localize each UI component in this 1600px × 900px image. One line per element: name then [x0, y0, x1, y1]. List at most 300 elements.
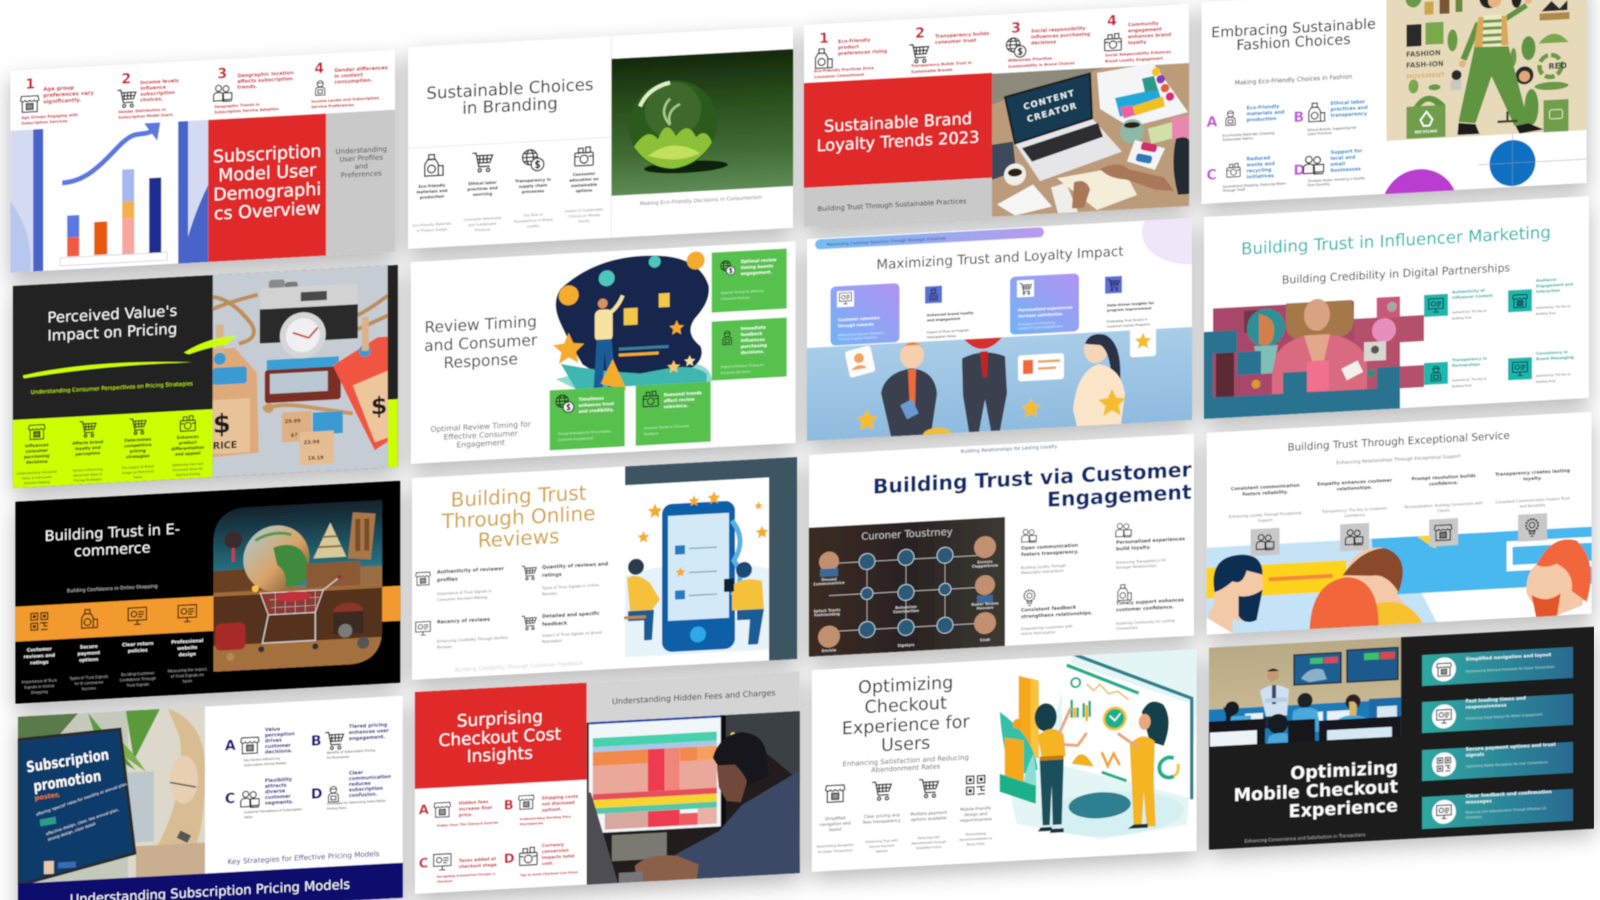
- item headings: Prompt resolution builds: [1411, 473, 1476, 483]
- item headings: customer: [265, 743, 291, 750]
- item subtext: Importance of Trust Signals in: [437, 589, 493, 596]
- item text: Ethical labor: [1330, 99, 1366, 107]
- title: Building Trust in Influencer Marketing: [1241, 223, 1551, 259]
- title: Through Online: [441, 501, 595, 533]
- panel: Subscription Model User Demographics Overview: [10, 50, 395, 273]
- sublabels: Eco-Friendly Materials: [413, 222, 451, 228]
- sublabels: Trends: [577, 219, 590, 224]
- icon circles: [1432, 657, 1456, 825]
- labels: Transparency in: [515, 177, 551, 184]
- item subtext: Building Loyalty Through: [1021, 564, 1066, 570]
- tile headings: timing boosts: [741, 263, 774, 270]
- item subtext: Authenticity: The Key to: [1452, 309, 1487, 314]
- panel: Building Trust via Customer Engagement: [809, 434, 1194, 657]
- sublabels: The Role of: [522, 213, 544, 218]
- labels: Influences: [25, 442, 49, 448]
- item headings: Personalized experiences: [1116, 536, 1185, 546]
- panel: Building Trust Through Exceptional Service: [1207, 412, 1592, 638]
- sublabels: for Faster Transactions: [818, 848, 853, 854]
- title: Surprising: [457, 707, 543, 732]
- sublabels: Optimal Pricing: [176, 472, 200, 477]
- item headings: Timely support enhances: [1116, 597, 1184, 607]
- item subtext: Enhancing Transparency for: [1116, 558, 1167, 565]
- title: Loyalty Trends 2023: [817, 127, 979, 155]
- item headings: fosters reliability.: [1242, 489, 1289, 498]
- item subtext: Hidden Fees: The Checkout Surprise: [437, 820, 498, 828]
- item subtext: Enhancing Credibility Through Verified: [437, 636, 508, 644]
- numbered items: trends.: [237, 84, 258, 91]
- title: Checkout: [865, 694, 947, 718]
- subtitle: Enhancing Relationships Through Exceptional Support: [1336, 453, 1461, 466]
- item headings: Partnerships: [1452, 361, 1481, 368]
- item subtext: Discrepancies: [520, 821, 544, 826]
- item headings: Taxes added at: [459, 856, 496, 864]
- illustration: person and stars: [553, 251, 712, 394]
- item subtext: Timeless Styles: Investing in Quality: [1307, 176, 1365, 183]
- labels: Multiple payment: [910, 810, 947, 817]
- tile icons: [1256, 519, 1538, 551]
- title: Insights: [467, 744, 533, 767]
- numbered items: Social Responsibility Enhances: [1105, 49, 1172, 58]
- numbered items: 3: [1011, 20, 1021, 37]
- sublabels: Boost Sales: [967, 842, 985, 847]
- labels: Determines: [124, 436, 152, 443]
- green tiles: [550, 249, 787, 450]
- item headings: Currency: [542, 842, 564, 849]
- item text: small: [1330, 161, 1345, 168]
- panel: Maximizing Trust and Loyalty Impact: Customer Loyalty Programs: [1107, 322, 1150, 329]
- title: Sustainable Choices: [426, 75, 594, 103]
- title: Sustainable Brand: [824, 109, 972, 136]
- panel: Optimizing Checkout Experience for Users: [812, 644, 1197, 872]
- labels: Secure: [80, 644, 98, 651]
- labels: Ethical labor: [468, 180, 497, 186]
- panel: Sustainable Choices in Branding: [408, 26, 793, 249]
- item headings: Detailed and specific: [542, 611, 600, 620]
- labels: options: [576, 187, 593, 193]
- illustration: business people and stars: [807, 324, 1192, 447]
- banner pill: Maximizing Customer Retention Through Strategic Initiatives: [827, 235, 946, 247]
- labels: competitive: [124, 442, 152, 448]
- red title block: [208, 113, 326, 262]
- item headings: diverse: [265, 788, 286, 795]
- tile subtext: Purchase Decisions: [721, 369, 751, 375]
- item text: businesses: [1330, 166, 1361, 174]
- numbered items: engagement: [1128, 26, 1163, 34]
- item text: local and: [1330, 155, 1356, 162]
- photo: call centre room: [1209, 637, 1401, 747]
- image: customer journey network: [809, 517, 1005, 657]
- labels: sourcing: [473, 191, 492, 197]
- labels: Simplified: [825, 815, 846, 821]
- panel: Perceived Value's Impact on Pricing: [13, 265, 398, 488]
- title: Experience: [1289, 796, 1398, 822]
- A B C D letters: D: [1294, 162, 1305, 179]
- labels: materials and: [416, 188, 448, 195]
- labels: fees transparency: [863, 818, 901, 825]
- sublabels: Confidence Through: [120, 677, 156, 683]
- photo: glass sphere: [611, 49, 793, 196]
- icons: [21, 79, 325, 113]
- labels: website: [177, 645, 197, 652]
- item headings: Interaction: [1536, 288, 1560, 294]
- title: Model User: [218, 161, 317, 186]
- labels: Enhances: [177, 434, 199, 440]
- item subtext: Secondhand Shopping: Reducing Waste: [1223, 181, 1286, 189]
- title: Experience for: [842, 712, 970, 739]
- feature subtext: Optimizing Mobile Navigation for User Convenience: [1466, 760, 1548, 769]
- item subtext: Benefits of Subscription Pricing: [327, 748, 375, 755]
- sublabels: Enhancing Trust with: [866, 838, 898, 844]
- title: Optimizing: [858, 673, 953, 698]
- labels: Eco-friendly: [419, 182, 446, 189]
- photo: laptop with subscription promotion: effective design, clear, low annual plan,: [45, 807, 119, 836]
- panel: Understanding Subscription Pricing Models: [18, 696, 403, 900]
- item headings: Authenticity of: [1452, 288, 1485, 294]
- item subtext: Confidence: [1344, 513, 1366, 518]
- numbered items: [21, 57, 388, 126]
- card text: increase satisfaction: [1018, 311, 1063, 318]
- column text: Data-driven insights for: [1107, 301, 1154, 308]
- photo: laptop with subscription promotion: strong design, clear detail: [47, 821, 96, 842]
- illustration: fashion woman: MOVEMENT: [1406, 72, 1446, 81]
- slate frame: [625, 457, 797, 668]
- photo: laptop on desk: CREATOR: [1026, 101, 1078, 125]
- sublabels: Factors Influencing: [73, 467, 103, 473]
- item headings: Transparency in: [1452, 356, 1487, 362]
- panel: Maximizing Trust and Loyalty Impact: Participation Rates: [927, 334, 956, 339]
- title: Perceived Value's: [47, 302, 177, 327]
- photo: camera and price tags: [213, 266, 388, 477]
- sublabels: for E-commerce: [74, 680, 104, 686]
- title: Optimizing: [1290, 758, 1398, 784]
- item text: Reduced: [1246, 155, 1271, 163]
- photo: laptop with subscription promotion: poster,: [34, 790, 60, 802]
- item subtext: Active Participation: [1021, 630, 1056, 636]
- item subtext: Stronger Relationships: [1116, 564, 1157, 570]
- item subtext: Pricing Plans: [327, 806, 347, 811]
- icons: [1022, 523, 1131, 606]
- tile headings: engagement.: [741, 269, 772, 276]
- labels: strategies: [126, 453, 150, 459]
- title: Checkout Cost: [438, 725, 561, 751]
- column text: program improvement: [1107, 306, 1152, 313]
- sublabels: Abandonment through: [911, 840, 946, 846]
- illustration: fashion woman: [1386, 0, 1586, 141]
- item headings: feedback: [542, 621, 568, 628]
- labels: Customer: [27, 646, 52, 654]
- item subtext: Authenticity: The Key to: [1452, 377, 1487, 382]
- feature headings: Fast loading times and: [1466, 695, 1526, 705]
- labels: and appeal: [175, 450, 201, 457]
- panel: Surprising Checkout Cost Insights: [415, 671, 800, 894]
- red title block: [415, 683, 587, 789]
- sublabels: Simplified Forms: [916, 845, 942, 850]
- A B C D letters: B: [1294, 109, 1304, 126]
- letters: C: [225, 791, 235, 807]
- numbered items: Eco-Friendly Practices Drive: [814, 65, 874, 73]
- item headings: price.: [459, 812, 473, 819]
- subtitle: Abandonment Rates: [871, 762, 941, 774]
- item headings: Shipping costs: [542, 794, 578, 802]
- numbered items: preferences rising: [838, 48, 888, 57]
- numbered items: choices.: [140, 96, 163, 104]
- item headings: Consistent communication: [1231, 483, 1300, 492]
- numbered items: in content: [334, 72, 363, 80]
- item subtext: and Reliability: [1520, 503, 1546, 509]
- item headings: increase final: [459, 805, 493, 813]
- sublabels: Building Customer: [121, 671, 155, 677]
- sublabels: Pricing Strategies: [74, 477, 102, 483]
- lime band: [13, 409, 213, 488]
- item headings: fosters transparency.: [1021, 549, 1079, 558]
- labels: differentiation: [171, 445, 205, 451]
- title: Mobile Checkout: [1234, 777, 1399, 806]
- numbered items: consumption.: [334, 78, 373, 86]
- item subtext: Building Trust: [1452, 315, 1472, 320]
- image caption: Making Eco-Friendly Decisions in Consumerism: [640, 195, 762, 207]
- numbered items: Gender Distribution in: [118, 107, 166, 114]
- item headings: communication: [349, 774, 392, 782]
- feature subtext: Streamlining Payment Processes for Faster Transactions: [1466, 665, 1555, 674]
- image: customer journey network: Fashionlding: [814, 612, 840, 617]
- numbered items: product: [838, 44, 860, 51]
- numbered items: Community: [1128, 21, 1160, 28]
- item subtext: Authenticity: The Key to: [1536, 372, 1571, 378]
- purple semicircle: [1384, 168, 1455, 195]
- tile subtext: Seasonal Trends in Consumer: [644, 424, 690, 430]
- kicker: Building Relationships for Lasting Loyalty: [961, 444, 1057, 455]
- illustration: fashion woman: FASH-ION: [1406, 60, 1444, 70]
- item text: recycling: [1246, 167, 1272, 175]
- photo: laptop on desk: [992, 61, 1190, 217]
- item subtext: Building Trust: [1452, 383, 1472, 388]
- item headings: upfront.: [542, 806, 562, 814]
- labels: pricing: [130, 448, 146, 454]
- tile headings: feedback: [741, 331, 762, 337]
- numbered items: Gender differences: [334, 65, 388, 74]
- item subtext: Reputation: [542, 639, 563, 644]
- letters: B: [311, 733, 322, 750]
- sublabels: Sales: [183, 679, 192, 684]
- item headings: Recency of reviews: [437, 617, 490, 626]
- labels: Clear pricing and: [864, 812, 900, 819]
- photo: laptop with subscription promotion: offering 'special' rates for monthly or annual plan,: [35, 781, 128, 817]
- numbered items: Subscription Model Users: [118, 112, 174, 120]
- illustration: two women at dashboard: [1000, 644, 1197, 845]
- item headings: Hidden fees: [459, 799, 489, 807]
- title: Reviews: [478, 524, 559, 552]
- labels: decisions: [26, 459, 48, 465]
- footer text: Building Credibility Through Customer Feedback: [455, 661, 584, 674]
- title: Fashion Choices: [1236, 32, 1351, 54]
- item text: waste and: [1246, 161, 1275, 169]
- feature subtext: Strategies: [1466, 815, 1482, 820]
- numbered items: Age group: [43, 85, 74, 93]
- item subtext: Sustainable Fabrics: [1222, 136, 1254, 142]
- icons: [434, 795, 537, 870]
- photo: camera and price tags: $: [371, 392, 387, 420]
- orange band: [15, 586, 400, 642]
- tile headings: enhances trust: [579, 401, 614, 408]
- item headings: Tiered pricing: [349, 722, 388, 730]
- panel: Maximizing Trust and Loyalty Impact: Measuring Customer Retention: [838, 331, 885, 337]
- panel: Maximizing Trust and Loyalty Impact: Through Loyalty Programs: [837, 335, 878, 341]
- item subtext: Consistent Communication Fosters Trust: [1495, 496, 1570, 504]
- feature subtext: Enhancing Visual Design for Better Engagement: [1466, 712, 1543, 721]
- item text: Support for: [1330, 148, 1363, 156]
- numbered items: Age Groups Engaging with: [21, 112, 78, 120]
- tile headings: purchasing: [741, 343, 767, 349]
- labels: perception: [75, 450, 100, 457]
- panel: Building Trust Through Online Reviews: [412, 457, 797, 680]
- image: customer journey network: Bulsanices: [895, 605, 917, 610]
- numbered items: Sustainable Brands: [911, 67, 953, 74]
- letters: A: [225, 738, 236, 754]
- item headings: Engagement and: [1536, 281, 1573, 288]
- photo: camera and price tags: 29.99: [285, 418, 301, 425]
- sublabels: in Product Design: [417, 227, 447, 233]
- sublabels: Transparency in Brand: [512, 218, 553, 224]
- panel: Building Trust in Influencer Marketing: [1204, 196, 1589, 419]
- subtitle: Effective Consumer: [444, 429, 519, 442]
- tile subtext: Feedback: [644, 431, 659, 436]
- numbered items: influence: [140, 85, 167, 92]
- numbered items: 2: [915, 25, 925, 42]
- numbered items: Transparency Builds Trust in: [911, 60, 972, 68]
- labels: Consumer: [573, 171, 595, 177]
- item subtext: Over Quantity: [1307, 182, 1330, 187]
- sublabels: Balancing Cost and: [172, 462, 203, 467]
- title: Response: [444, 350, 518, 372]
- numbered items: 2: [121, 71, 131, 88]
- labels: design and: [964, 811, 988, 817]
- labels: reviews and: [24, 653, 55, 660]
- sublabels: Value in Consumer: [22, 475, 52, 481]
- numbered items: Consumer Commitment: [814, 72, 864, 79]
- numbered items: Service Preferences: [311, 102, 355, 109]
- item text: transparency: [1330, 111, 1368, 119]
- sublabels: Loyalty: [527, 224, 539, 229]
- subtitle: Building Trust Through Sustainable Practices: [818, 197, 967, 213]
- tile icons: [556, 260, 735, 413]
- decorative corner circle: [1142, 193, 1242, 267]
- subtitle: Building Confidence in Online Shopping: [67, 583, 158, 594]
- item text: Eco-friendly: [1246, 104, 1280, 112]
- feature headings: signals: [1466, 752, 1484, 759]
- panel: Building Trust in E-commerce: [15, 481, 400, 704]
- item subtext: Customer Perceptions of Subscription: [244, 807, 302, 814]
- subtitle: and: [355, 162, 368, 171]
- sublabels: Success: [82, 686, 96, 691]
- item subtext: for Businesses: [327, 755, 350, 760]
- photo: camera and price tags: 19.19: [308, 455, 324, 462]
- item headings: drives: [265, 738, 282, 744]
- caption: Enhancing Convenience and Satisfaction in Transactions: [1244, 832, 1366, 845]
- icons: [1226, 103, 1325, 179]
- icons: [241, 732, 344, 808]
- card text: Personalized experiences: [1018, 304, 1073, 312]
- labels: navigation and: [820, 820, 851, 827]
- title: Demographi: [213, 180, 321, 206]
- item subtext: Value: [244, 815, 252, 819]
- photo: camera and price tags: RICE: [213, 440, 237, 452]
- red title block: [804, 73, 992, 188]
- teal feature cards: [1422, 647, 1573, 829]
- feature headings: Secure payment options and trust: [1466, 742, 1557, 753]
- item subtext: Empowering Customers with: [1021, 624, 1073, 631]
- title: Engagement: [1047, 480, 1192, 512]
- feature subtext: Reducing Cart Abandonment Through Effective UX: [1466, 806, 1547, 815]
- labels: ratings: [30, 659, 49, 666]
- subtitle: User Profiles: [339, 153, 383, 164]
- image: customer journey network: Hancaro: [977, 606, 994, 611]
- item headings: cost.: [542, 860, 554, 867]
- labels: loyalty and: [75, 445, 101, 451]
- A B C D letters: A: [1206, 114, 1217, 131]
- panel: Optimizing Mobile Checkout Experience: [1209, 627, 1594, 850]
- image: customer journey network: Envisle: [822, 648, 837, 653]
- image: customer journey network: Signtyrs: [898, 643, 914, 648]
- sublabels: Perceived Value for: [172, 467, 204, 472]
- sublabels: Signals in Online: [24, 684, 55, 690]
- item subtext: Navigating Unexpected Charges in: [437, 872, 495, 879]
- photo: laptop with subscription promotion: Subscription: [25, 746, 110, 776]
- title: Subscription: [213, 142, 322, 168]
- item headings: Audience: [1536, 277, 1557, 283]
- image: customer journey network: Cloppertrose: [972, 563, 999, 569]
- labels: practices and: [467, 185, 498, 192]
- numbered items: enhances brand: [1128, 32, 1172, 40]
- subtitle: Engagement: [456, 438, 505, 450]
- numbered items: 1: [819, 31, 829, 47]
- tile icons: [1429, 294, 1527, 381]
- numbered items: influences purchasing: [1031, 31, 1091, 41]
- item headings: customer confidence.: [1116, 604, 1174, 613]
- title: Impact on Pricing: [47, 320, 177, 345]
- tile subtext: Impact of Review Timing on: [721, 363, 764, 369]
- icon row: [425, 146, 593, 177]
- tile headings: Optimal review: [741, 257, 777, 264]
- numbered items: [814, 10, 1172, 79]
- item subtext: Support: [1258, 518, 1273, 523]
- item subtext: Building Trust: [1536, 379, 1556, 384]
- column text: Enhanced brand loyalty: [927, 311, 974, 317]
- icon tiles: [1251, 513, 1547, 556]
- numbered items: 4: [1107, 13, 1117, 29]
- item headings: loyalty.: [1523, 475, 1542, 482]
- numbered items: subscription: [140, 90, 176, 98]
- labels: responsiveness: [960, 816, 992, 823]
- sublabels: Choices on Market: [568, 213, 601, 219]
- item headings: Consistency in: [1536, 349, 1568, 356]
- labels: purchasing: [24, 453, 50, 459]
- tile headings: affect review: [664, 397, 695, 403]
- tile headings: relevance.: [664, 403, 689, 409]
- item subtext: Meaningful Interactions: [1021, 569, 1063, 575]
- item subtext: Checkout: [437, 879, 453, 884]
- labels: Affects brand: [72, 439, 103, 446]
- strategies caption: Key Strategies for Effective Pricing Models: [228, 849, 380, 866]
- photo: laptop with subscription promotion: [18, 706, 205, 884]
- panel: Sustainable Brand Loyalty Trends 2023: [804, 4, 1190, 227]
- item subtext: Strategies for Optimizing Subscription: [327, 799, 386, 806]
- item headings: not disclosed: [542, 800, 575, 808]
- icons: [816, 32, 1121, 68]
- item subtext: Labor Practices: [1307, 131, 1332, 136]
- item headings: Quantity of reviews and: [542, 561, 609, 571]
- sublabels: Trust Signals: [125, 682, 149, 688]
